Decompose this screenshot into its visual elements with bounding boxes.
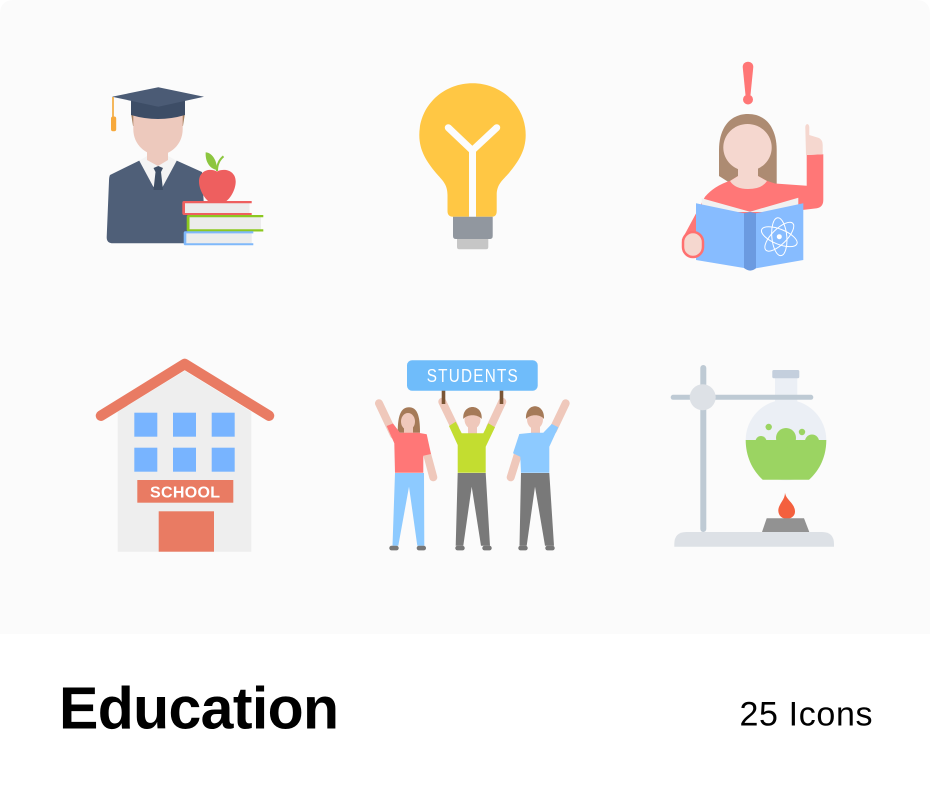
icon: graduate with apple and books [107, 87, 263, 245]
icon: school building: SCHOOL [150, 484, 220, 501]
icon: students holding a sign: STUDENTS [427, 365, 519, 386]
student 3 [513, 406, 558, 550]
title: Education [59, 675, 339, 741]
icon: light bulb [419, 83, 526, 249]
student 1 [387, 407, 431, 550]
icon: school building [101, 364, 269, 552]
icon: teacher reading a science book [682, 62, 823, 271]
student 2 [449, 407, 495, 550]
icon: chemistry flask on a burner [671, 365, 834, 547]
icon: students holding a sign [379, 360, 566, 550]
icon count label: 25 Icons [740, 695, 872, 733]
